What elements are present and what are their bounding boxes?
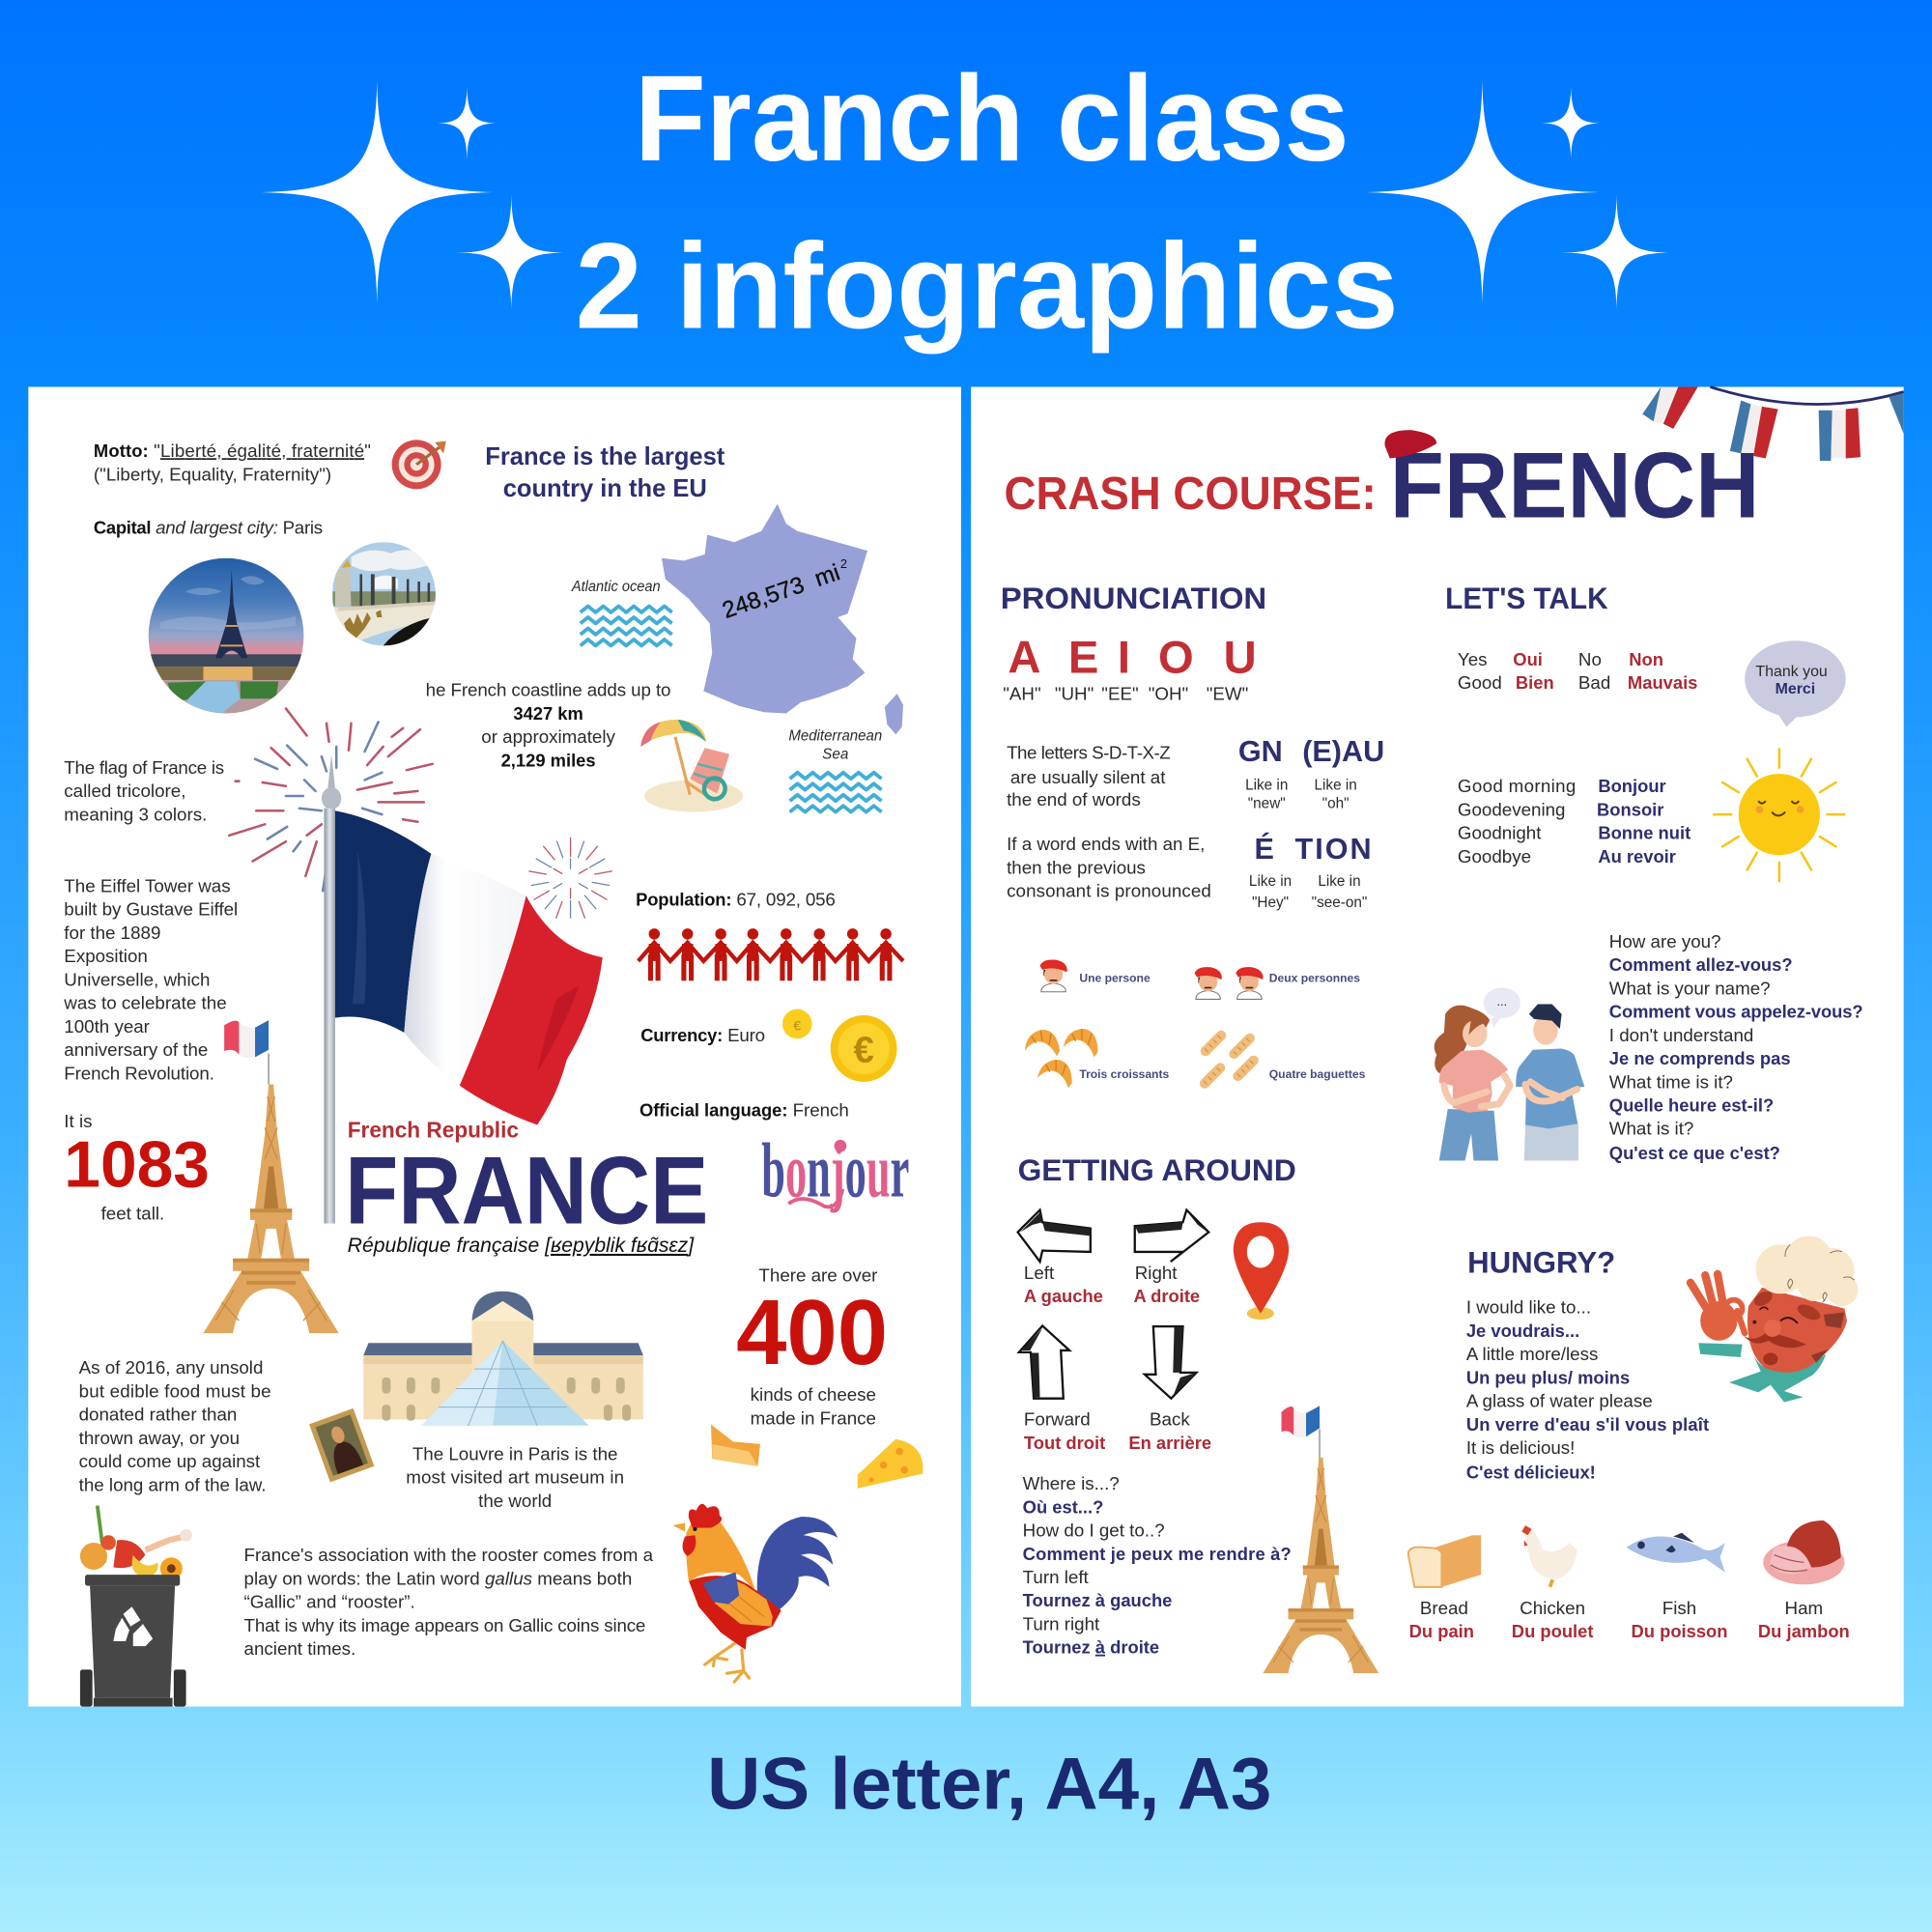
flag text: meaning 3 colors. bbox=[64, 804, 207, 824]
label: Mediterranean Sea bbox=[788, 728, 882, 763]
directions: A droite bbox=[1133, 1286, 1200, 1306]
questions bbox=[1609, 931, 1863, 1163]
rooster text: France's association with the rooster comes from a bbox=[244, 1545, 654, 1565]
sounds: Like in bbox=[1245, 778, 1288, 794]
speech bubble: thank you: Thank you bbox=[1755, 664, 1828, 680]
cheese figure: 400 bbox=[736, 1281, 888, 1384]
silent letters text bbox=[1007, 743, 1171, 810]
yes no vocabulary bbox=[1458, 649, 1697, 693]
food phrases: A glass of water please bbox=[1466, 1391, 1653, 1411]
population text: Population: 67, 092, 056 bbox=[636, 889, 836, 909]
directions: Forward bbox=[1024, 1409, 1091, 1430]
Eiffel text: Universelle, which bbox=[64, 969, 210, 989]
counting examples bbox=[1022, 959, 1366, 1091]
Eiffel text: 100th year bbox=[64, 1016, 150, 1037]
questions: What is it? bbox=[1609, 1119, 1693, 1139]
icon: left arrow bbox=[1018, 1210, 1091, 1262]
height figure: It is bbox=[64, 1111, 92, 1131]
greetings: Au revoir bbox=[1598, 846, 1676, 867]
icon: small fireworks bbox=[529, 838, 611, 918]
Louvre text bbox=[406, 1443, 624, 1511]
direction phrases: Comment je peux me rendre à? bbox=[1023, 1544, 1292, 1564]
heading: largest country: country in the EU bbox=[503, 475, 707, 502]
icon: small euro coin: € bbox=[793, 1017, 801, 1033]
greetings bbox=[1458, 776, 1690, 867]
label: Mediterranean Sea: Mediterranean bbox=[788, 728, 882, 745]
heading: French Republic: French Republic bbox=[348, 1117, 519, 1142]
vowels: "OH" bbox=[1149, 683, 1188, 703]
icon: smiling sun bbox=[1714, 750, 1844, 881]
speech bubble: thank you bbox=[1745, 640, 1846, 727]
icon: beret bbox=[1384, 430, 1436, 458]
food phrases bbox=[1466, 1297, 1709, 1483]
vowels: "EW" bbox=[1207, 683, 1248, 703]
sounds: "new" bbox=[1248, 796, 1286, 812]
heading: largest country: France is the largest bbox=[485, 443, 725, 470]
directions bbox=[1024, 1263, 1211, 1453]
vowels: E bbox=[1068, 632, 1098, 683]
coastline text: 2,129 miles bbox=[501, 750, 596, 770]
icon: fish bbox=[1627, 1533, 1725, 1573]
subheading: native name: République française [ʁepyblik fʁɑ̃sɛz] bbox=[348, 1235, 695, 1257]
map: France: 2 bbox=[840, 556, 847, 571]
food vocabulary: Bread bbox=[1420, 1598, 1468, 1618]
height figure: feet tall. bbox=[101, 1204, 164, 1224]
final E text: If a word ends with an E, bbox=[1007, 834, 1205, 854]
Eiffel text: built by Gustave Eiffel bbox=[64, 899, 238, 920]
food vocabulary: Fish bbox=[1662, 1598, 1696, 1618]
motto text bbox=[94, 440, 371, 484]
map: France: 248,573 mi bbox=[719, 559, 843, 624]
label: Atlantic ocean: Atlantic ocean bbox=[571, 579, 661, 595]
title: Franch class bbox=[635, 50, 1350, 186]
yes no vocabulary: Oui bbox=[1513, 649, 1543, 669]
food phrases: C'est délicieux! bbox=[1466, 1463, 1596, 1483]
food vocabulary: Chicken bbox=[1520, 1598, 1585, 1618]
heading: hungry: HUNGRY? bbox=[1467, 1245, 1615, 1280]
title: FRENCH: FRENCH bbox=[1390, 433, 1759, 538]
photo: Paris bridge bbox=[332, 542, 437, 645]
food waste text: As of 2016, any unsold bbox=[79, 1357, 263, 1378]
food phrases: Un verre d'eau s'il vous plaît bbox=[1466, 1414, 1709, 1435]
icon: large euro coin bbox=[831, 1015, 897, 1082]
counting examples: Une persone bbox=[1079, 972, 1151, 985]
food vocabulary: Du pain bbox=[1409, 1621, 1474, 1641]
food waste text bbox=[79, 1357, 271, 1494]
questions: Comment allez-vous? bbox=[1609, 954, 1793, 975]
label: Mediterranean Sea: Sea bbox=[822, 747, 848, 763]
yes no vocabulary: Bien bbox=[1516, 672, 1554, 693]
coastline text: or approximately bbox=[481, 726, 616, 747]
counting examples: Trois croissants bbox=[1079, 1067, 1169, 1081]
rooster text: ancient times. bbox=[244, 1638, 355, 1659]
directions: Right bbox=[1135, 1263, 1178, 1283]
heading: largest country bbox=[485, 443, 725, 502]
sounds: "Hey" bbox=[1252, 895, 1289, 911]
icon: Louvre with pyramid bbox=[363, 1292, 643, 1426]
icon: chicken bbox=[1521, 1525, 1577, 1587]
motto text: Motto: "Liberté, égalité, fraternité" bbox=[94, 440, 371, 461]
greetings: Goodnight bbox=[1458, 823, 1542, 843]
heading: FRANCE: FRANCE bbox=[345, 1138, 708, 1245]
icon: ham bbox=[1763, 1520, 1844, 1584]
icon: Eiffel Tower bbox=[1263, 1458, 1378, 1673]
greetings: Bonsoir bbox=[1597, 799, 1663, 819]
heading: getting around: GETTING AROUND bbox=[1018, 1152, 1296, 1187]
sounds: TION bbox=[1295, 833, 1372, 866]
icon: small tricolour on tower bbox=[224, 1020, 269, 1084]
sounds: Like in bbox=[1315, 778, 1357, 794]
sounds: (E)AU bbox=[1302, 735, 1384, 768]
silent letters text: are usually silent at bbox=[1010, 767, 1166, 787]
sounds: "see-on" bbox=[1312, 895, 1367, 911]
direction phrases: Where is...? bbox=[1023, 1473, 1120, 1493]
vowels: A bbox=[1008, 632, 1040, 683]
coastline text: he French coastline adds up to bbox=[426, 680, 671, 700]
Eiffel text: French Revolution. bbox=[64, 1063, 214, 1083]
sounds: "oh" bbox=[1322, 796, 1350, 812]
vowels: U bbox=[1224, 632, 1257, 683]
title bbox=[576, 50, 1399, 354]
Louvre text: The Louvre in Paris is the bbox=[412, 1443, 617, 1463]
vowels: "AH" bbox=[1003, 683, 1041, 703]
questions: What is your name? bbox=[1609, 978, 1771, 998]
title: crash course: CRASH COURSE: bbox=[1005, 468, 1377, 520]
heading: pronunciation: PRONUNCIATION bbox=[1001, 581, 1266, 615]
Louvre text: most visited art museum in bbox=[406, 1467, 624, 1488]
yes no vocabulary: Yes bbox=[1458, 649, 1488, 669]
icon: Atlantic waves bbox=[581, 607, 672, 645]
greetings: Bonjour bbox=[1598, 776, 1666, 796]
icon: small tricolour bbox=[1282, 1406, 1320, 1458]
food waste text: but edible food must be bbox=[79, 1380, 271, 1401]
food vocabulary: Du poisson bbox=[1632, 1621, 1728, 1641]
questions: What time is it? bbox=[1609, 1071, 1733, 1092]
panel: French crash course bbox=[971, 387, 1904, 1707]
directions: Back bbox=[1150, 1409, 1190, 1430]
direction phrases: Où est...? bbox=[1023, 1496, 1103, 1517]
Eiffel text: Exposition bbox=[64, 946, 148, 966]
Eiffel text: The Eiffel Tower was bbox=[64, 875, 231, 895]
directions: En arrière bbox=[1128, 1433, 1211, 1453]
icon: target bbox=[392, 440, 446, 489]
icon: yellow cheese bbox=[858, 1439, 923, 1489]
icon: right sparkles bbox=[1367, 80, 1672, 310]
icon: large euro coin: € bbox=[853, 1029, 874, 1070]
sounds: Like in bbox=[1249, 873, 1292, 890]
Eiffel text: anniversary of the bbox=[64, 1039, 208, 1060]
final E text: consonant is pronounced bbox=[1007, 881, 1211, 901]
coastline text bbox=[426, 680, 671, 770]
icon: rooster bbox=[672, 1504, 838, 1682]
icon: soft cheese bbox=[711, 1424, 760, 1466]
direction phrases: Tournez à gauche bbox=[1023, 1590, 1172, 1610]
cheese figure: made in France bbox=[751, 1407, 876, 1428]
icon: couple talking: ... bbox=[1497, 994, 1507, 1009]
vowels: I bbox=[1118, 632, 1130, 683]
vowels: "UH" bbox=[1055, 683, 1094, 703]
coastline text: 3427 km bbox=[513, 703, 583, 724]
directions: Tout droit bbox=[1024, 1433, 1105, 1453]
vowels bbox=[1003, 632, 1257, 703]
food phrases: Un peu plus/ moins bbox=[1466, 1367, 1630, 1387]
food vocabulary: Ham bbox=[1785, 1598, 1823, 1618]
food phrases: It is delicious! bbox=[1466, 1437, 1575, 1458]
title: 2 infographics bbox=[576, 217, 1399, 354]
Eiffel text: for the 1889 bbox=[64, 923, 160, 943]
greetings: Bonne nuit bbox=[1598, 823, 1690, 843]
sounds bbox=[1238, 735, 1384, 911]
food phrases: I would like to... bbox=[1466, 1297, 1591, 1318]
final E text: then the previous bbox=[1007, 857, 1146, 877]
Eiffel text bbox=[63, 875, 238, 1083]
yes no vocabulary: Bad bbox=[1578, 672, 1610, 693]
heading: let's talk: LET'S TALK bbox=[1445, 581, 1608, 615]
official language text: Official language: French bbox=[639, 1100, 849, 1121]
questions: Comment vous appelez-vous? bbox=[1609, 1002, 1863, 1022]
icon: back arrow bbox=[1145, 1326, 1197, 1399]
icon: recycling bin with food bbox=[80, 1506, 192, 1707]
Eiffel text: was to celebrate the bbox=[63, 993, 227, 1013]
cheese figure: There are over bbox=[758, 1265, 877, 1286]
yes no vocabulary: No bbox=[1578, 649, 1602, 669]
vowels: O bbox=[1158, 632, 1194, 683]
flag text: called tricolore, bbox=[64, 781, 185, 801]
greetings: Goodbye bbox=[1458, 846, 1531, 867]
questions: Quelle heure est-il? bbox=[1609, 1095, 1774, 1116]
panel: France facts bbox=[28, 387, 961, 1707]
icon: chef bbox=[1690, 1236, 1858, 1403]
footer: formats: US letter, A4, A3 bbox=[707, 1743, 1271, 1825]
sounds: É bbox=[1254, 832, 1274, 866]
flag of France with pole bbox=[322, 754, 603, 1224]
speech bubble: thank you: Merci bbox=[1776, 681, 1815, 697]
rooster text: That is why its image appears on Gallic coins since bbox=[244, 1615, 645, 1635]
height figure: 1083 bbox=[64, 1128, 210, 1201]
food phrases: Je voudrais... bbox=[1466, 1321, 1579, 1341]
height figure bbox=[64, 1111, 210, 1224]
people chain bbox=[639, 928, 903, 980]
food vocabulary: Du poulet bbox=[1512, 1621, 1593, 1641]
sounds: Like in bbox=[1318, 873, 1361, 890]
direction phrases: Turn right bbox=[1023, 1613, 1100, 1634]
food vocabulary: Du jambon bbox=[1758, 1621, 1850, 1641]
food waste text: the long arm of the law. bbox=[79, 1474, 267, 1494]
directions: A gauche bbox=[1024, 1286, 1103, 1306]
vowels: "EE" bbox=[1101, 683, 1139, 703]
icon: Mona Lisa bbox=[309, 1408, 374, 1482]
rooster text: “Gallic” and “rooster”. bbox=[244, 1592, 415, 1612]
icon: large fireworks bbox=[229, 708, 433, 891]
bonjour lettering: bonjour bbox=[761, 1128, 909, 1214]
direction phrases bbox=[1023, 1473, 1292, 1658]
rooster text bbox=[244, 1545, 654, 1659]
map: France bbox=[662, 504, 903, 734]
icon: left sparkles bbox=[261, 80, 567, 310]
sounds: GN bbox=[1238, 735, 1283, 768]
silent letters text: The letters S-D-T-X-Z bbox=[1007, 743, 1171, 763]
icon: Mediterranean waves bbox=[790, 773, 882, 812]
icon: couple talking bbox=[1435, 987, 1584, 1161]
direction phrases: How do I get to..? bbox=[1023, 1520, 1165, 1541]
food waste text: thrown away, or you bbox=[79, 1428, 240, 1448]
questions: Je ne comprends pas bbox=[1609, 1048, 1791, 1068]
final E text bbox=[1007, 834, 1211, 901]
direction phrases: Turn left bbox=[1023, 1567, 1090, 1587]
questions: Qu'est ce que c'est? bbox=[1609, 1143, 1780, 1163]
direction phrases: Tournez à droite bbox=[1023, 1637, 1159, 1658]
food waste text: donated rather than bbox=[79, 1405, 237, 1425]
greetings: Goodevening bbox=[1458, 799, 1565, 819]
rooster text: play on words: the Latin word gallus means both bbox=[244, 1568, 632, 1588]
icon: location pin bbox=[1234, 1222, 1289, 1320]
counting examples: Deux personnes bbox=[1269, 972, 1360, 985]
yes no vocabulary: Mauvais bbox=[1628, 672, 1697, 693]
greetings: Good morning bbox=[1458, 776, 1576, 796]
flag text bbox=[64, 757, 224, 824]
Louvre text: the world bbox=[478, 1491, 552, 1511]
icon: bread bbox=[1408, 1535, 1481, 1587]
icon: beach chair and umbrella bbox=[640, 720, 743, 812]
flag text: The flag of France is bbox=[64, 757, 224, 778]
questions: How are you? bbox=[1609, 931, 1721, 952]
cheese figure bbox=[736, 1265, 888, 1428]
directions: Left bbox=[1024, 1263, 1055, 1283]
cheese figure: kinds of cheese bbox=[751, 1384, 876, 1405]
capital text: Capital and largest city: Paris bbox=[94, 517, 323, 537]
icon: bunting bbox=[1642, 387, 1904, 461]
questions: I don't understand bbox=[1609, 1025, 1753, 1045]
photo: Eiffel tower at dusk bbox=[148, 558, 304, 714]
food vocabulary bbox=[1409, 1598, 1850, 1641]
icon: small euro coin bbox=[782, 1009, 812, 1038]
yes no vocabulary: Non bbox=[1629, 649, 1663, 669]
food waste text: could come up against bbox=[79, 1451, 261, 1471]
counting examples: Quatre baguettes bbox=[1269, 1067, 1366, 1081]
icon: right arrow bbox=[1135, 1210, 1208, 1262]
silent letters text: the end of words bbox=[1007, 789, 1141, 810]
icon: Eiffel Tower bbox=[203, 1084, 339, 1333]
food phrases: A little more/less bbox=[1466, 1344, 1598, 1364]
yes no vocabulary: Good bbox=[1458, 672, 1502, 693]
icon: forward arrow bbox=[1019, 1325, 1069, 1399]
currency text: Currency: Euro bbox=[640, 1025, 765, 1045]
motto text: ("Liberty, Equality, Fraternity") bbox=[94, 464, 331, 484]
